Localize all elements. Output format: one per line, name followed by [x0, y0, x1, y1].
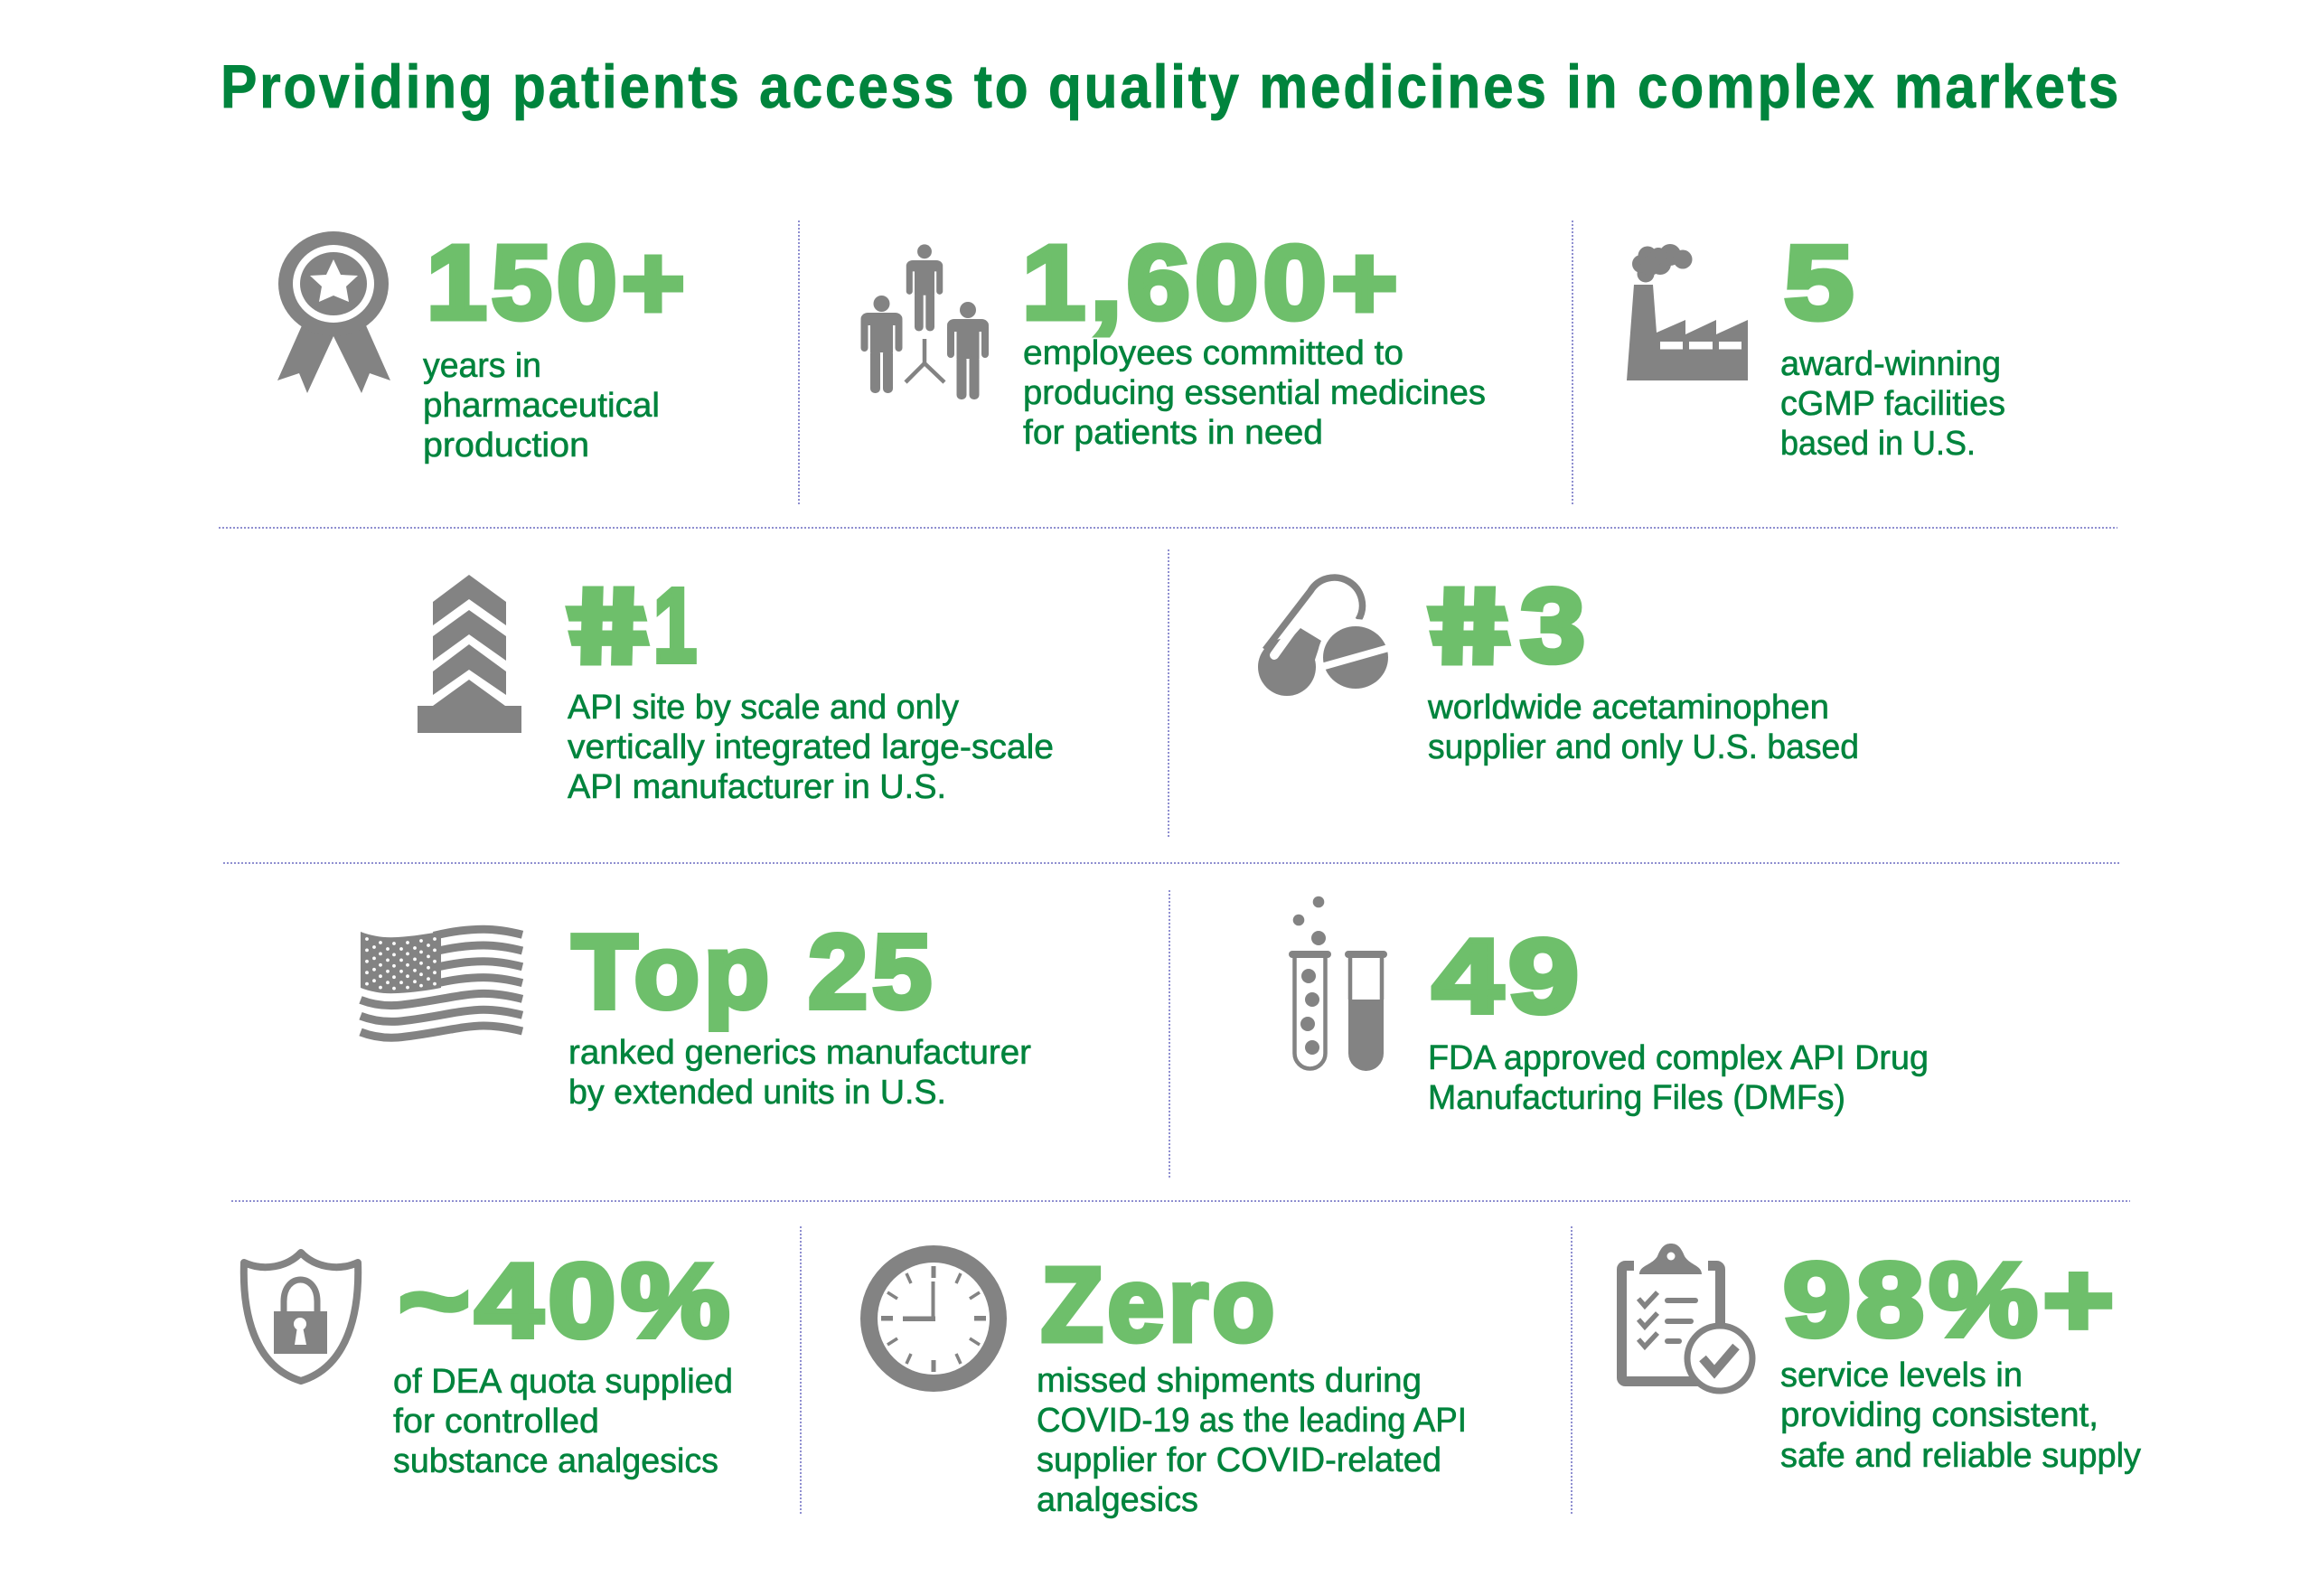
text: ranked generics: ranked generics manufacturer: [568, 1034, 1031, 1072]
text: missed shipments: analgesics: [1037, 1481, 1198, 1519]
text: years in pharmaceutical production: [423, 347, 660, 465]
text: missed shipments: supplier for COVID-related: [1037, 1441, 1441, 1479]
stat: 1,600+ employees: [860, 224, 1486, 452]
text: service levels: service levels in: [1780, 1357, 2023, 1394]
number: ~40%: ~40%: [399, 1242, 735, 1359]
title: Providing patients access to quality medicines in complex markets: [221, 52, 2121, 121]
text: service levels: [1780, 1357, 2141, 1475]
text: years in pharmaceutical production: years in: [423, 347, 541, 385]
text: employees committed: producing essential medicines: [1023, 374, 1486, 412]
text: employees committed: [1023, 334, 1486, 452]
text: acetaminophen supplier: supplier and only U.S. based: [1428, 728, 1859, 766]
stat: #1 API site: [418, 567, 1054, 806]
text: employees committed: employees committed to: [1023, 334, 1403, 372]
text: award-winning facilities: cGMP facilities: [1780, 385, 2005, 423]
number: #1: [555, 567, 697, 684]
text: API site by scale: [568, 689, 1054, 806]
stat: Zero missed shipments: [860, 1245, 1467, 1519]
text: service levels: safe and reliable supply: [1780, 1437, 2141, 1475]
text: DEA quota: of DEA quota supplied: [393, 1363, 733, 1401]
stat: Top 25: [361, 913, 1031, 1112]
text: FDA approved: FDA approved complex API Drug: [1428, 1039, 1929, 1077]
number: #3: [1416, 567, 1585, 684]
icon: American flag: [361, 929, 522, 1037]
stat: 98%+ service levels: [1621, 1241, 2141, 1475]
stat: 150+ years: [277, 224, 690, 465]
text: FDA approved: Manufacturing Files (DMFs): [1428, 1079, 1845, 1117]
text: missed shipments: COVID-19 as the leading API: [1037, 1402, 1467, 1440]
number: Top 25: Top 25: [572, 913, 936, 1030]
icon: test tubes: [1289, 897, 1387, 1071]
number: 1,600+: 1,600+: [1022, 224, 1403, 342]
text: API site by scale: API manufacturer in U.S.: [568, 768, 946, 806]
stat: #3 acetaminophen: [1258, 567, 1859, 766]
icon: award ribbon: [277, 231, 390, 393]
text: missed shipments: missed shipments during: [1037, 1362, 1422, 1400]
number: #3: #: [1416, 567, 1521, 684]
number: #3: 3: [1520, 567, 1585, 684]
text: acetaminophen supplier: worldwide acetaminophen: [1427, 689, 1829, 727]
icon: clock: [860, 1245, 1007, 1392]
text: employees committed: for patients in need: [1023, 414, 1323, 452]
text: DEA quota: substance analgesics: [393, 1442, 718, 1480]
number: #1: 1: [653, 567, 697, 684]
text: ranked generics: [568, 1034, 1031, 1112]
icon: factory: [1627, 244, 1748, 380]
text: award-winning facilities: [1780, 345, 2005, 463]
text: years in pharmaceutical production: production: [423, 427, 589, 465]
stat: 5 facilities: [1627, 224, 2005, 463]
text: FDA approved: [1428, 1039, 1929, 1117]
text: award-winning facilities: based in U.S.: [1780, 425, 1976, 463]
number: Zero: Zero: [1041, 1245, 1279, 1363]
number: 98%+: 98%+: [1783, 1241, 2119, 1358]
number: 150+: 150+: [427, 224, 690, 342]
stat: ~40% DEA quota: [244, 1242, 735, 1480]
number: 5: 5: [1784, 224, 1854, 342]
text: API site by scale: API site by scale and only: [568, 689, 959, 727]
text: DEA quota: for controlled: [393, 1403, 599, 1441]
text: DEA quota: [393, 1363, 733, 1480]
icon: clipboard with check: [1621, 1244, 1752, 1391]
text: award-winning facilities: award-winning: [1780, 345, 2001, 383]
number: 49: 49: [1432, 917, 1584, 1035]
text: API site by scale: vertically integrated large-scale: [568, 728, 1054, 766]
icon: shield with padlock: [244, 1253, 358, 1381]
text: missed shipments: [1037, 1362, 1467, 1519]
icon: stacked chevrons: [418, 575, 521, 733]
number: #1: #: [555, 567, 660, 684]
text: service levels: providing consistent,: [1780, 1396, 2098, 1434]
text: years in pharmaceutical production: pharmaceutical: [423, 387, 660, 425]
icon: three people connected: [860, 244, 989, 399]
stat: 49 DMFs: [1289, 897, 1929, 1117]
text: acetaminophen supplier: [1427, 689, 1859, 766]
text: ranked generics: by extended units in U.S.: [568, 1074, 946, 1112]
icon: capsule and tablet: [1258, 577, 1394, 696]
